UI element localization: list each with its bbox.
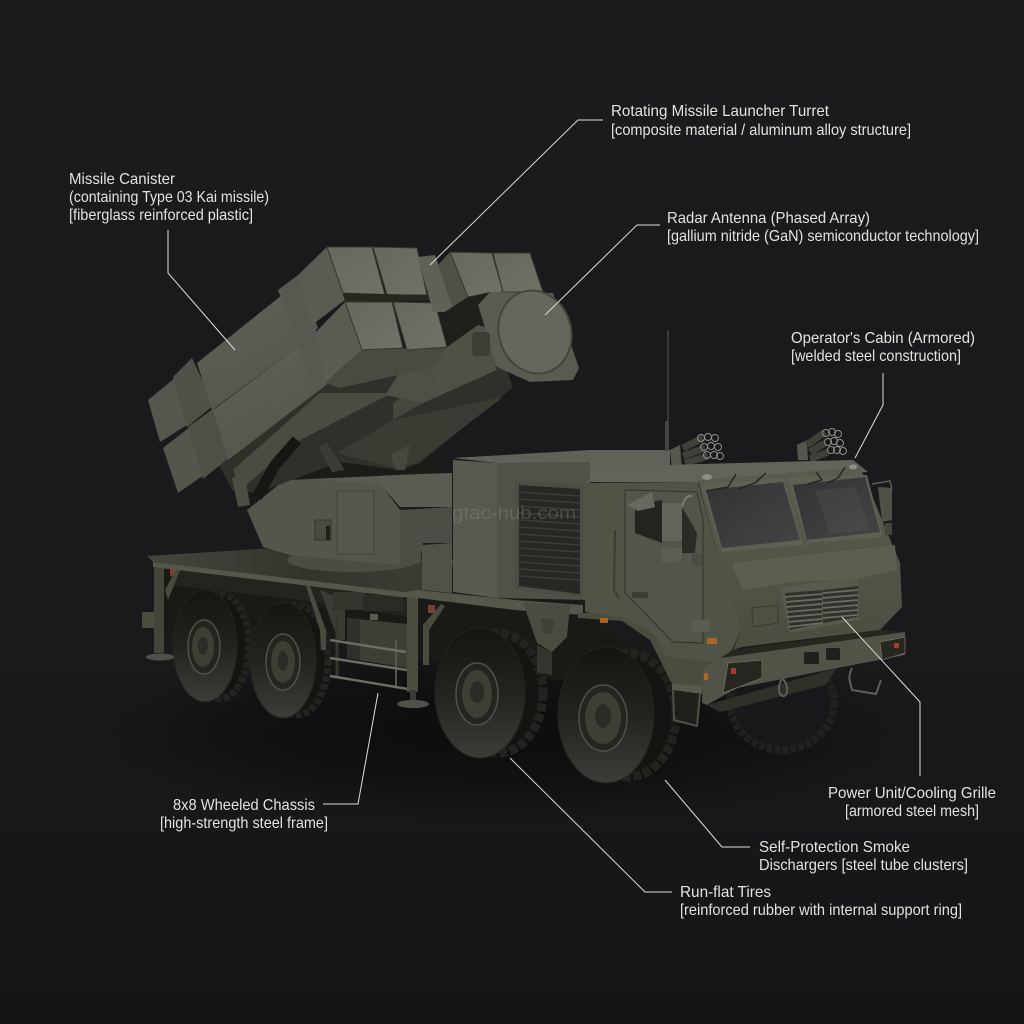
smoke dischargers left bbox=[670, 434, 724, 470]
stabilizer legs bbox=[142, 565, 445, 708]
label: run-flat tires: Run-flat Tires bbox=[680, 884, 771, 901]
flatbed deck bbox=[147, 547, 460, 598]
rear wheel 2 bbox=[250, 602, 328, 718]
label: missile canister: (containing Type 03 Kai missile) bbox=[69, 189, 269, 206]
label: radar antenna: [gallium nitride (GaN) semiconductor technology] bbox=[667, 228, 979, 245]
lower long canister bbox=[213, 302, 447, 460]
launcher cradle bbox=[218, 333, 513, 507]
door bbox=[600, 490, 717, 644]
leader line: chassis bbox=[323, 693, 378, 804]
front grille bbox=[780, 577, 859, 633]
wipers bbox=[706, 467, 845, 491]
radar antenna bbox=[430, 281, 582, 395]
right mirror bbox=[872, 481, 892, 535]
wheel arch and fender bbox=[578, 613, 717, 726]
rear canister ends bbox=[148, 358, 230, 493]
upper front bevel bbox=[732, 545, 897, 590]
label: radar antenna: Radar Antenna (Phased Array) bbox=[667, 210, 870, 227]
cab front bbox=[698, 467, 902, 650]
windshield right bbox=[788, 475, 883, 543]
turret base bbox=[247, 473, 452, 572]
missile canisters bbox=[148, 247, 543, 493]
label: wheeled chassis bbox=[160, 797, 328, 832]
leader line: cooling grille bbox=[842, 617, 920, 776]
leader line: smoke dischargers bbox=[665, 780, 750, 847]
tow hooks bbox=[779, 668, 881, 696]
cab side bbox=[585, 482, 742, 663]
gtac-hub watermark: gtac-hub.com bbox=[452, 503, 576, 523]
lower valance bbox=[707, 668, 837, 712]
label: power unit cooling grille bbox=[828, 785, 996, 820]
front bumper bbox=[702, 632, 905, 705]
label: smoke dischargers: Dischargers [steel tube clusters] bbox=[759, 857, 968, 874]
label: rotating missile launcher turret bbox=[611, 103, 911, 139]
equipment box and grille bbox=[418, 450, 670, 675]
label: rotating missile launcher turret: [composite material / aluminum alloy structure] bbox=[611, 122, 911, 139]
windshield left bbox=[702, 478, 803, 552]
label: missile canister: [fiberglass reinforced plastic] bbox=[69, 207, 253, 224]
radio antenna bbox=[665, 330, 669, 451]
leader line: radar antenna bbox=[545, 225, 660, 315]
vehicle illustration bbox=[142, 247, 905, 783]
fuel tank and step rails bbox=[330, 612, 408, 689]
label: radar antenna bbox=[667, 210, 979, 245]
label: power unit cooling grille: [armored steel mesh] bbox=[845, 803, 979, 820]
label: run-flat tires bbox=[680, 884, 962, 919]
leader line: missile canister bbox=[168, 230, 235, 350]
front wheel 4 bbox=[558, 647, 676, 783]
cabin bbox=[578, 460, 905, 726]
cab roof bbox=[587, 460, 868, 482]
chassis underside bbox=[158, 562, 700, 700]
leader line: operator cabin bbox=[855, 373, 883, 458]
roof marker lights bbox=[702, 464, 857, 480]
label: missile canister bbox=[69, 171, 269, 224]
label: rotating missile launcher turret: Rotating Missile Launcher Turret bbox=[611, 103, 830, 120]
back canister pair bbox=[418, 252, 543, 347]
label: power unit cooling grille: Power Unit/Cooling Grille bbox=[828, 785, 996, 802]
smoke dischargers right bbox=[797, 428, 846, 460]
leader line: launcher turret bbox=[430, 120, 603, 265]
label: smoke dischargers: Self-Protection Smoke bbox=[759, 839, 910, 856]
rear wheel 1 bbox=[173, 590, 249, 702]
label: operator's cabin: Operator's Cabin (Armored) bbox=[791, 330, 975, 347]
leader line: run-flat tires bbox=[510, 758, 672, 892]
label: wheeled chassis: 8x8 Wheeled Chassis bbox=[173, 797, 315, 814]
far front wheel bbox=[730, 654, 834, 750]
ground shadow bbox=[60, 635, 940, 825]
label: operator's cabin: [welded steel construction] bbox=[791, 348, 961, 365]
under bumper shadow bbox=[720, 630, 905, 658]
label: missile canister: Missile Canister bbox=[69, 171, 176, 188]
label: wheeled chassis: [high-strength steel frame] bbox=[160, 815, 328, 832]
label: smoke dischargers bbox=[759, 839, 968, 874]
upper long canister bbox=[197, 247, 440, 410]
access plate bbox=[752, 605, 778, 627]
front-mid wheel 3 bbox=[435, 628, 543, 758]
label: run-flat tires: [reinforced rubber with internal support ring] bbox=[680, 902, 962, 919]
label: operator's cabin bbox=[791, 330, 975, 365]
